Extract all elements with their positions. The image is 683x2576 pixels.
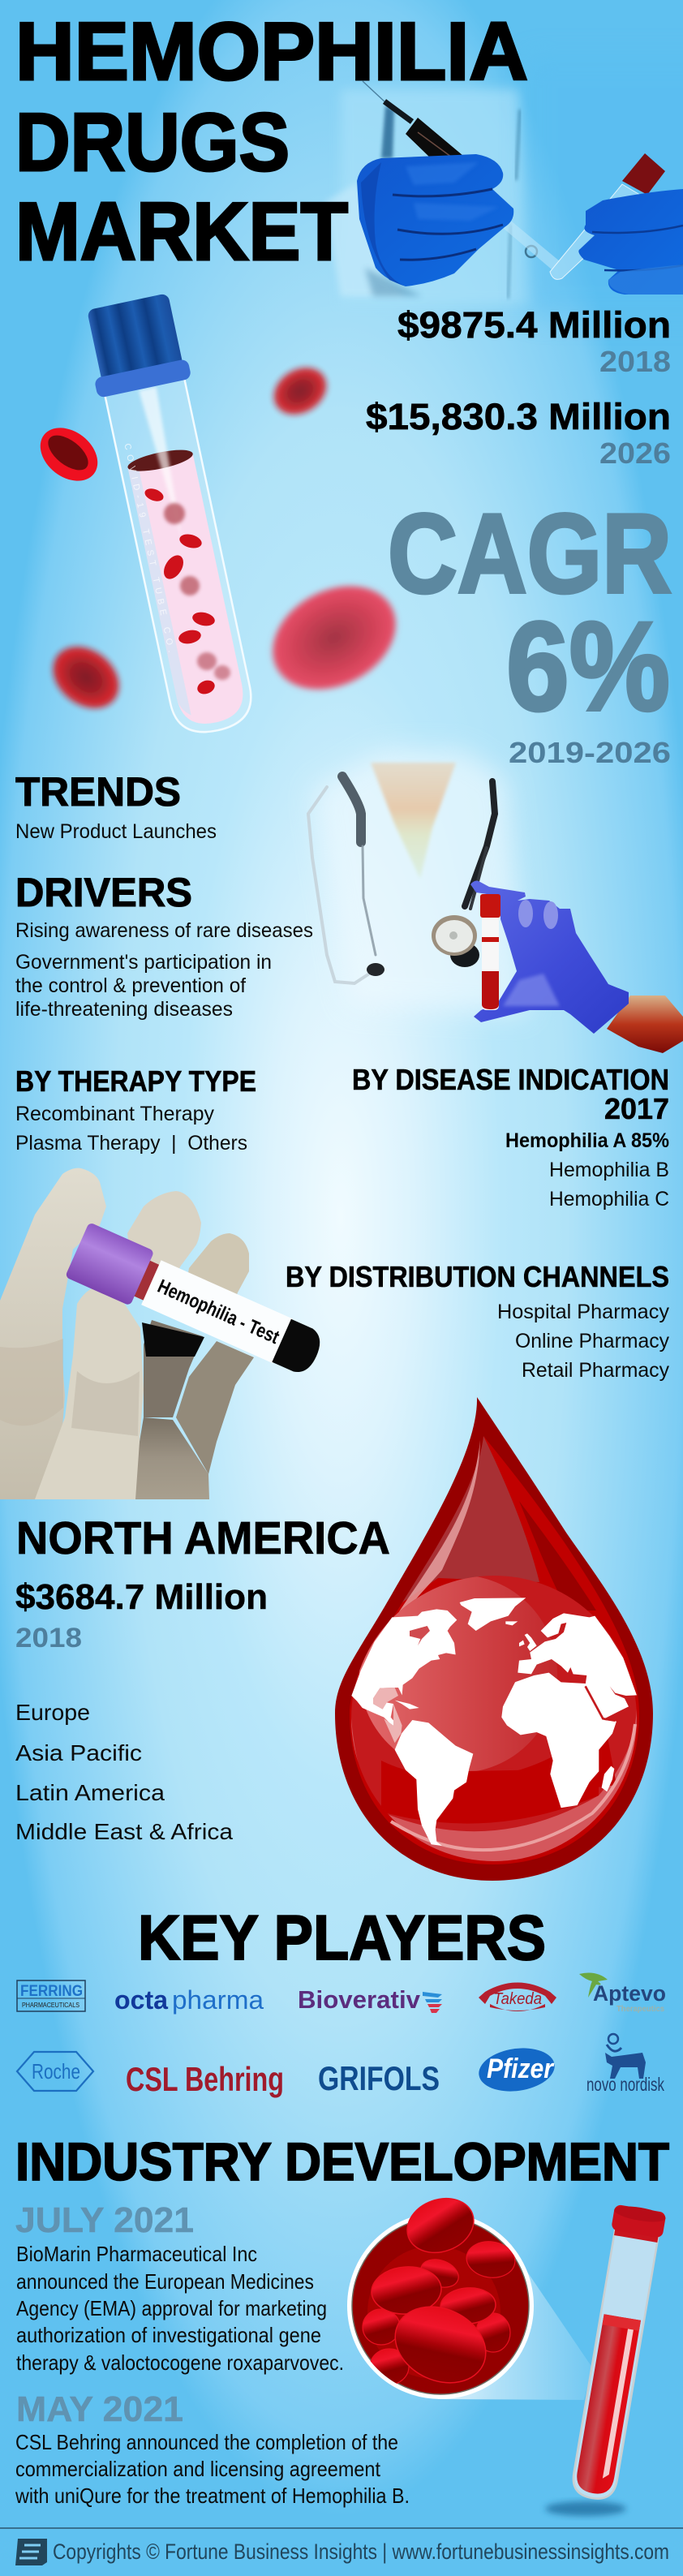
title [15,6,528,277]
tube body [105,376,257,739]
drivers: life-threatening diseases [15,998,233,1021]
by therapy type [15,1064,256,1155]
by disease indication: Hemophilia C [549,1188,669,1211]
red-capped blood tube [545,2204,667,2516]
thumb [35,1288,144,1499]
drivers: Rising awareness of rare diseases [15,919,313,942]
key players heading: KEY PLAYERS [138,1902,546,1973]
development: July 2021: announced the European Medicines [16,2269,314,2294]
test tube: Hemophilia - Test [154,1275,282,1348]
logo: Novo Nordisk [586,2034,664,2095]
logo: Octapharma [114,1985,264,2015]
index finger and palm [0,1168,106,1499]
faint syringe at edge [649,847,683,850]
lower dark fingers [144,1320,203,1417]
title: MARKET [15,187,348,277]
blood drop globe [335,1397,653,1899]
by disease indication: Hemophilia A 85% [505,1129,669,1152]
sample tube [550,153,665,279]
coat button [526,246,537,257]
logo: Takeda: Takeda [493,1990,542,2008]
trends: TRENDS [15,769,181,815]
by distribution channels: Retail Pharmacy [522,1359,669,1382]
syringe [363,81,468,160]
market size 2026: $15,830.3 Million [366,396,671,437]
by disease indication [352,1063,669,1211]
trends [15,769,217,843]
test tube [65,1222,329,1383]
highlight [139,387,188,541]
drop inner [350,1436,639,1864]
other regions: Europe [15,1700,90,1725]
logo: Octapharma: pharma [172,1985,264,2015]
right blue glove [578,189,683,295]
other regions: Asia Pacific [15,1740,142,1765]
tube shadow [545,2501,626,2516]
other regions [15,1700,233,1844]
north america: 2018 [15,1623,82,1654]
logo: Takeda [479,1983,556,2011]
by distribution channels [286,1260,669,1382]
drivers: DRIVERS [15,870,192,915]
by therapy type: Recombinant Therapy [15,1103,214,1125]
title: DRUGS [15,97,290,188]
logo: CSL Behring: CSL Behring [126,2060,284,2098]
magnified blood cells [350,2190,592,2400]
market size 2026 [366,396,671,470]
illustration: blue-capped test tube [79,292,264,740]
development: July 2021 [15,2200,344,2375]
sleeve [607,996,683,1053]
neckline [371,763,456,879]
by distribution channels: Online Pharmacy [515,1330,669,1353]
logo: Grifols: GRIFOLS [318,2059,440,2097]
CAGR: 2019-2026 [509,736,671,769]
by distribution channels: Hospital Pharmacy [497,1301,669,1323]
logo: Ferring: PHARMACEUTICALS [22,2002,79,2009]
image: gloved hand holding Hemophilia test tube [0,1168,329,1499]
development: July 2021: JULY 2021 [15,2200,194,2240]
image: doctor with stethoscope [308,750,683,1053]
logo: Ferring [17,1980,85,2011]
tube held between hands [469,191,560,269]
market size 2018: $9875.4 Million [397,304,671,346]
logo: Pfizer [476,2044,557,2096]
other regions: Latin America [15,1780,165,1805]
liquid [127,454,248,729]
drivers: Government's participation in [15,951,272,974]
development: May 2021: CSL Behring announced the completion of the [15,2430,398,2454]
market size 2018: 2018 [599,345,671,378]
trends: New Product Launches [15,820,217,843]
red blood cells [30,359,414,720]
logo: Aptevo [579,1973,666,2014]
logo: Aptevo: Therapeutics [616,2004,664,2014]
development: July 2021: therapy & valoctocogene roxaparvovec. [16,2350,344,2375]
blood collection tube [480,894,500,1010]
chest piece [450,943,479,967]
other regions: Middle East & Africa [15,1819,233,1844]
logo: Roche: Roche [32,2059,80,2084]
drivers [15,870,313,1021]
by disease indication: Hemophilia B [549,1159,669,1181]
blue cap [87,293,183,383]
left blue glove [357,154,513,286]
north america [15,1512,390,1654]
continents [351,1598,637,1846]
stethoscope tubes [308,776,495,983]
north america: $3684.7 Million [15,1577,268,1617]
cells in tube [143,486,230,696]
development: July 2021: Agency (EMA) approval for marketing [16,2296,327,2320]
development: May 2021: with uniQure for the treatment of Hemophilia B. [15,2484,410,2508]
by therapy type: BY THERAPY TYPE [15,1064,256,1098]
market size 2018 [397,304,671,378]
image: gloved hands with syringe and sample tube [324,57,683,316]
north america: NORTH AMERICA [16,1512,390,1564]
purple glove [470,881,629,1034]
logo: Pfizer: Pfizer [487,2053,555,2084]
title: HEMOPHILIA [15,6,528,97]
by disease indication: 2017 [604,1092,669,1125]
lab coat [341,89,531,304]
logo: Roche [17,2052,93,2091]
development: May 2021: commercialization and licensing agreement [15,2457,381,2481]
logo: Octapharma: octa [114,1985,168,2015]
logo: Bioverativ: Bioverativ [298,1985,421,2014]
footer logo [15,2539,47,2565]
CAGR [388,491,672,769]
rear fingers [127,1191,201,1298]
drivers: the control & prevention of [15,974,246,997]
by therapy type: Plasma Therapy | Others [15,1132,247,1155]
development: May 2021 [15,2389,410,2508]
development: July 2021: authorization of investigational gene [16,2323,321,2347]
faint tube lettering: COVID-19 TEST TUBE CO. [122,443,176,653]
development: July 2021: BioMarin Pharmaceutical Inc [16,2242,257,2266]
footer [0,2528,683,2565]
logo: Aptevo: Aptevo [593,1981,666,2006]
development: May 2021: MAY 2021 [16,2389,183,2429]
globe sphere [351,1576,637,1832]
logo: Ferring: FERRING [20,1983,83,2000]
market size 2026: 2026 [599,437,671,470]
